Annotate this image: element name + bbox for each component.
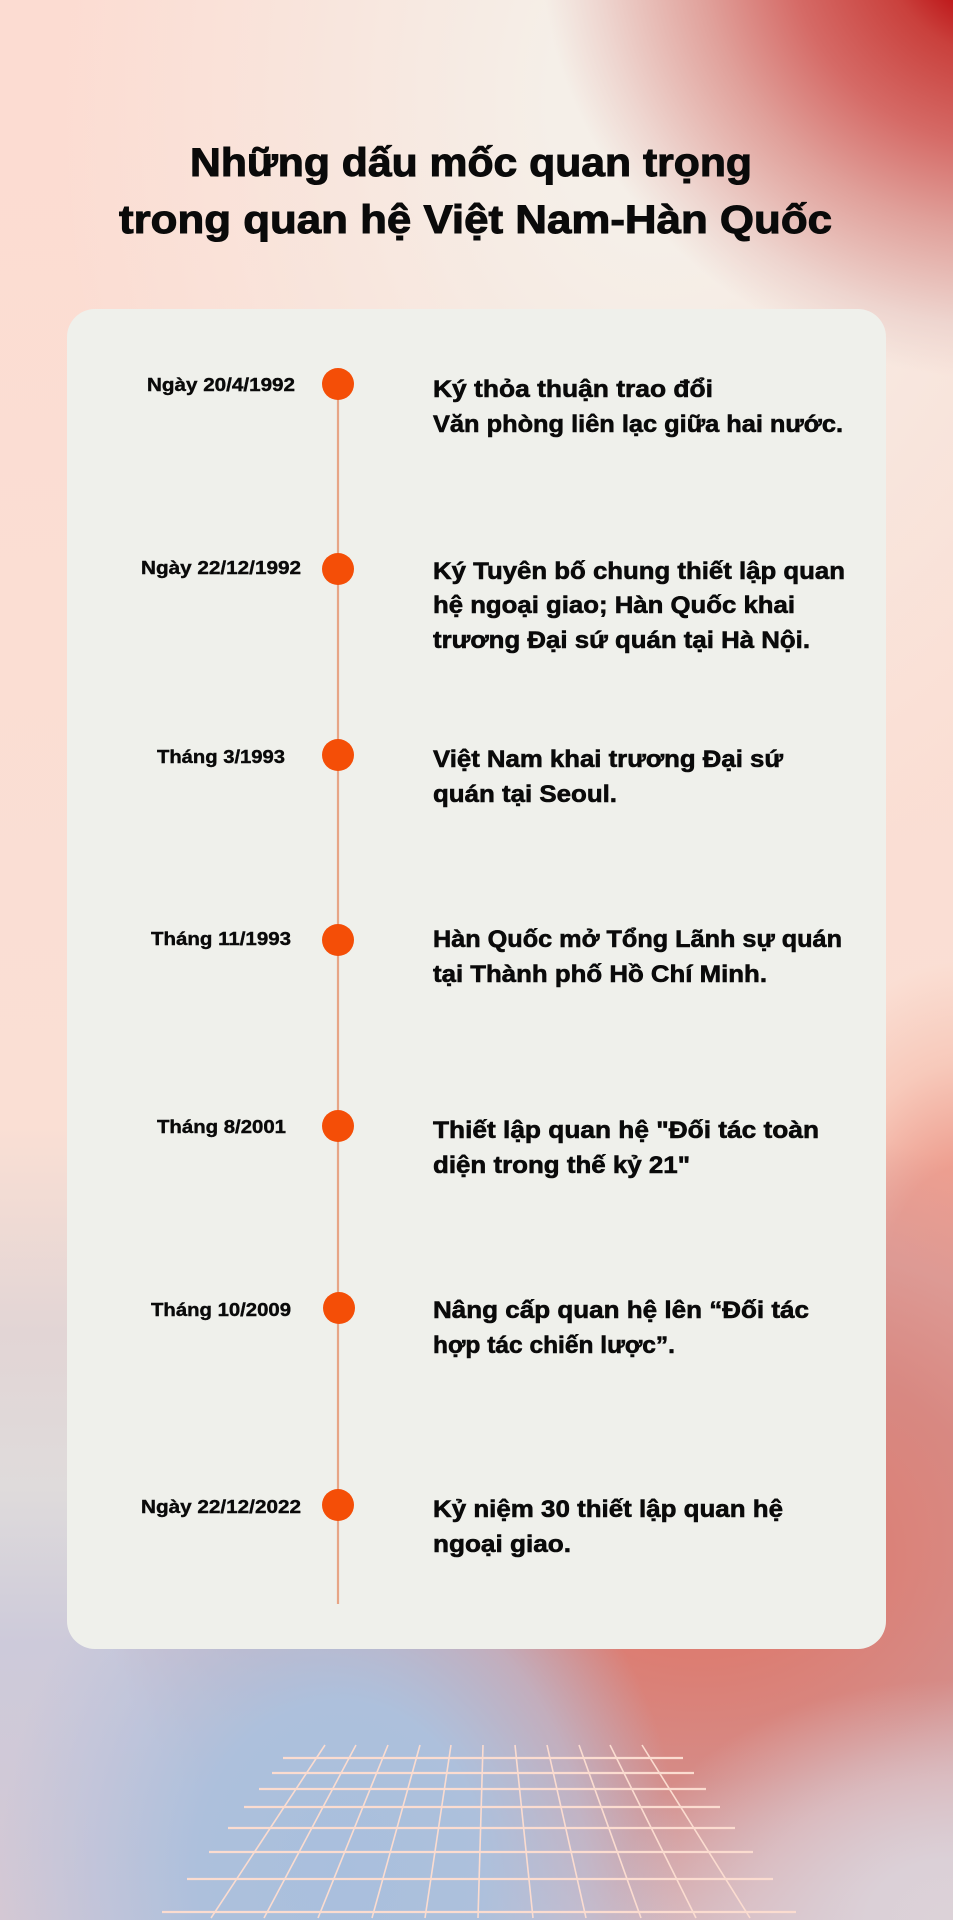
panel: timeline card xyxy=(67,309,886,1649)
milestone: 3/1993: quán tại Seoul. xyxy=(433,781,617,808)
milestone: 3/1993: Việt Nam khai trương Đại sứ xyxy=(433,746,784,773)
milestone: 22/12/2022: Kỷ niệm 30 thiết lập quan hệ xyxy=(433,1496,783,1523)
milestone: 20/4/1992 xyxy=(147,368,843,438)
milestone: 22/12/1992: trương Đại sứ quán tại Hà Nội. xyxy=(433,627,810,654)
decorative perspective grid xyxy=(162,1745,796,1918)
milestone: 20/4/1992: Ngày 20/4/1992 xyxy=(147,375,295,395)
milestone: 10/2009 xyxy=(151,1292,809,1359)
milestone: 11/1993: Tháng 11/1993 xyxy=(151,929,291,949)
title xyxy=(119,141,832,242)
milestone: 3/1993 xyxy=(157,739,784,808)
milestone: 20/4/1992: Văn phòng liên lạc giữa hai nước. xyxy=(433,411,843,438)
milestone: 11/1993: Hàn Quốc mở Tổng Lãnh sự quán xyxy=(433,926,842,953)
milestone: 22/12/1992: Ký Tuyên bố chung thiết lập quan xyxy=(433,558,845,585)
milestone: 22/12/2022: Ngày 22/12/2022 xyxy=(141,1497,301,1517)
milestone: 8/2001 xyxy=(157,1110,819,1179)
milestone: 3/1993: Tháng 3/1993 xyxy=(157,747,285,767)
milestone: 11/1993 xyxy=(151,924,842,988)
title: trong quan hệ Việt Nam-Hàn Quốc xyxy=(119,198,832,242)
milestone: 22/12/2022: ngoại giao. xyxy=(433,1531,571,1558)
milestone: 10/2009: Tháng 10/2009 xyxy=(151,1300,291,1320)
milestone: 20/4/1992: Ký thỏa thuận trao đổi xyxy=(433,376,713,403)
milestone: 10/2009: Nâng cấp quan hệ lên “Đối tác xyxy=(433,1297,809,1324)
milestone: 8/2001: diện trong thế kỷ 21" xyxy=(433,1152,690,1179)
milestone: 22/12/1992: hệ ngoại giao; Hàn Quốc khai xyxy=(433,592,795,619)
timeline axis line xyxy=(337,384,339,1604)
title: Những dấu mốc quan trọng xyxy=(190,141,752,185)
milestone: 8/2001: Tháng 8/2001 xyxy=(157,1117,286,1137)
milestone: 22/12/1992 xyxy=(141,553,845,654)
milestone: 22/12/2022 xyxy=(141,1489,783,1558)
milestone: 22/12/1992: Ngày 22/12/1992 xyxy=(141,558,301,578)
milestone: 10/2009: hợp tác chiến lược”. xyxy=(433,1332,675,1359)
milestone: 11/1993: tại Thành phố Hồ Chí Minh. xyxy=(433,961,767,988)
milestone: 8/2001: Thiết lập quan hệ "Đối tác toàn xyxy=(433,1117,819,1144)
